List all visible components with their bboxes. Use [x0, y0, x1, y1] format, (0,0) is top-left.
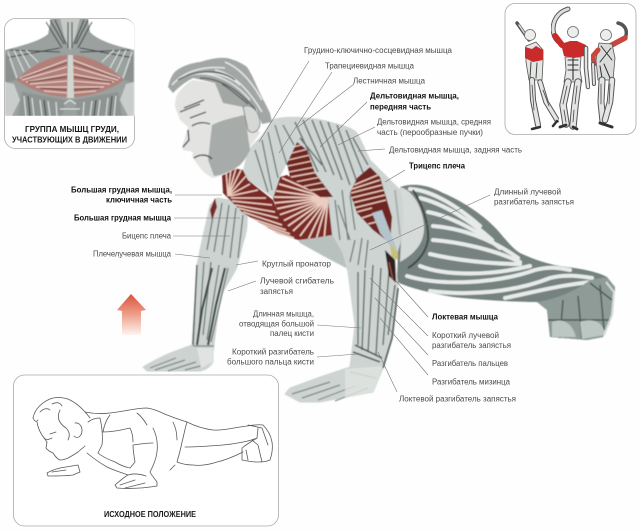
pectoral muscle, left part — [222, 168, 298, 240]
labels: right side: Грудино-ключично-сосцевидная мышца — [304, 46, 453, 55]
labels: right side: часть (перообразные пучки) — [377, 128, 483, 137]
pectoral muscle, right lower part — [273, 175, 332, 240]
labels: right side: Дельтовидная мышца, — [370, 92, 459, 100]
labels: right side: Дельтовидная мышца, средняя — [377, 118, 491, 126]
chest inset caption: ГРУППА МЫШЦ ГРУДИ, — [25, 124, 119, 134]
figure: left side view — [517, 23, 557, 129]
leg and foot — [397, 185, 615, 340]
leader lines — [173, 61, 490, 392]
labels: lower right: Разгибатель мизинца — [432, 378, 511, 386]
chest muscle illustration — [5, 18, 135, 116]
chest inset caption: УЧАСТВУЮЩИХ В ДВИЖЕНИИ — [12, 134, 127, 144]
labels: right side: Трицепс плеча — [409, 162, 466, 170]
hip edge — [408, 190, 428, 268]
head — [168, 58, 272, 178]
labels: right side: Длинный лучевой — [494, 188, 561, 196]
labels: left side: Бицепс плеча — [122, 232, 172, 240]
labels: lower right — [399, 312, 516, 404]
labels: forearm centre: отводящая большой — [239, 320, 314, 328]
labels: forearm centre: запястья — [260, 287, 293, 296]
labels: forearm centre: большого пальца кисти — [227, 358, 314, 366]
labels: right side: Лестничная мышца — [353, 76, 426, 86]
labels: right side: Трапециевидная мышца — [325, 62, 415, 70]
panel: chest muscle group inset — [4, 18, 135, 148]
figure: back view — [593, 23, 626, 127]
labels: forearm centre: Длинная мышца, — [253, 310, 314, 318]
icon: upward arrow — [117, 294, 146, 335]
pectoral muscle, right upper part — [287, 142, 333, 197]
labels: right side: Дельтовидная мышца, задняя часть — [389, 146, 522, 154]
labels: right side: передняя часть — [370, 102, 431, 112]
line drawing: man in starting position — [33, 397, 272, 488]
labels: forearm centre: палец кисти — [270, 329, 314, 338]
left arm — [143, 198, 247, 371]
figure: front view — [553, 9, 588, 129]
triceps muscle — [350, 167, 398, 283]
neck — [243, 120, 297, 198]
hip — [400, 187, 424, 262]
starting position caption: ИСХОДНОЕ ПОЛОЖЕНИЕ — [104, 509, 196, 519]
labels: lower right: Локтевой разгибатель запястья — [399, 394, 516, 404]
neck tendons — [255, 125, 294, 192]
torso and abdomen — [298, 195, 350, 270]
labels: forearm centre: Круглый пронатор — [262, 260, 332, 268]
labels: forearm centre: Лучевой сгибатель — [260, 276, 334, 286]
chest inset caption — [12, 124, 127, 144]
labels: left side: ключичная часть — [106, 196, 172, 204]
labels: lower right: Короткий лучевой — [432, 331, 499, 340]
labels: forearm centre — [227, 260, 334, 366]
right arm and shoulder — [272, 117, 403, 402]
labels: right side: разгибатель запястья — [494, 198, 574, 206]
labels: lower right: разгибатель запястья — [432, 341, 511, 350]
labels: left side: Плечелучевая мышца — [93, 250, 172, 258]
labels: left side — [71, 186, 172, 258]
panel: three figures inset — [505, 4, 636, 134]
labels: left side: Большая грудная мышца — [74, 214, 172, 222]
labels: right side — [304, 46, 574, 206]
labels: lower right: Разгибатель пальцев — [432, 359, 508, 368]
labels: lower right: Локтевая мышца — [432, 312, 499, 322]
labels: forearm centre: Короткий разгибатель — [232, 348, 314, 356]
panel: starting position inset — [14, 375, 278, 526]
illustration: man doing push-up with muscles — [143, 58, 615, 402]
labels: left side: Большая грудная мышца, — [71, 186, 172, 194]
